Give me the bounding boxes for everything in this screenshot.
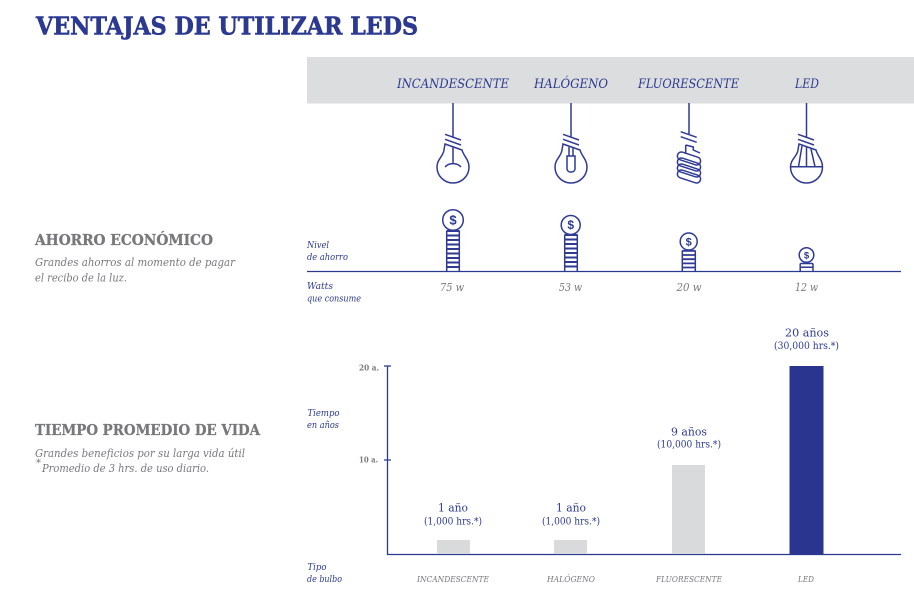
x axis category labels <box>416 573 814 585</box>
label: tiempo en anos <box>307 408 340 431</box>
watt values: 53 w <box>559 281 582 294</box>
coin stack: incandescent <box>443 210 463 271</box>
label: tiempo en anos: en años <box>307 420 339 431</box>
label: nivel de ahorro <box>306 240 348 263</box>
text block: tiempo description: Promedio de 3 hrs. de uso diario. <box>41 462 209 475</box>
label: watts que consume: Watts <box>307 281 333 292</box>
header band with bulb type names <box>307 57 914 104</box>
x axis category labels: FLUORESCENTE <box>655 575 723 585</box>
y axis with ticks <box>359 364 901 555</box>
coin stack: halogen <box>561 216 580 271</box>
bar: incandescent 1 year: (1,000 hrs.*) <box>424 516 482 528</box>
bar: LED 20 years <box>774 326 839 554</box>
header band with bulb type names: HALÓGENO <box>533 75 608 92</box>
section heading: tiempo promedio de vida: TIEMPO PROMEDIO DE VIDA <box>35 422 261 439</box>
text block: tiempo description: * <box>36 458 41 469</box>
bar: halogen 1 year <box>542 500 600 554</box>
bar: halogen 1 year: 1 año <box>556 500 586 514</box>
watt values: 20 w <box>676 281 702 294</box>
label: nivel de ahorro: Nivel <box>306 240 329 251</box>
icon: halogen bulb <box>555 103 587 183</box>
x axis category labels: LED <box>797 575 814 585</box>
bar: fluorescent 9 years: 9 años <box>671 424 707 438</box>
bar: halogen 1 year: (1,000 hrs.*) <box>542 516 600 528</box>
icon: incandescent bulb <box>437 103 469 183</box>
text block: ahorro description <box>35 256 236 284</box>
coin stack: fluorescent <box>680 233 697 271</box>
section heading: ahorro economico: AHORRO ECONÓMICO <box>34 231 213 249</box>
text block: tiempo description <box>35 447 245 475</box>
bar: LED 20 years: (30,000 hrs.*) <box>774 340 839 352</box>
label: tipo de bulbo: Tipo <box>308 562 327 573</box>
y axis with ticks: 20 a. <box>359 364 379 374</box>
savings chart baseline <box>307 270 901 272</box>
watt values: 12 w <box>795 281 818 294</box>
coin stack: incandescent: $ <box>449 212 457 228</box>
text block: ahorro description: Grandes ahorros al momento de pagar <box>35 256 236 269</box>
label: tipo de bulbo <box>307 562 342 585</box>
watt values: 75 w <box>440 281 465 294</box>
coin stack: fluorescent: $ <box>686 236 692 248</box>
bar: fluorescent 9 years <box>657 424 721 554</box>
bar: incandescent 1 year: 1 año <box>438 500 468 514</box>
label: nivel de ahorro: de ahorro <box>307 252 348 263</box>
y axis with ticks: 10 a. <box>359 456 378 466</box>
title: VENTAJAS DE UTILIZAR LEDS <box>35 12 418 40</box>
coin stack: LED: $ <box>804 250 810 261</box>
x axis category labels: INCANDESCENTE <box>416 575 490 585</box>
watt values <box>440 281 818 294</box>
label: watts que consume: que consume <box>307 294 361 304</box>
bar: incandescent 1 year <box>424 500 482 554</box>
header band with bulb type names: INCANDESCENTE <box>396 77 509 92</box>
header band with bulb type names: FLUORESCENTE <box>637 77 739 92</box>
bar: fluorescent 9 years: (10,000 hrs.*) <box>657 438 721 450</box>
header band with bulb type names: LED <box>794 77 819 92</box>
text block: tiempo description: Grandes beneficios por su larga vida útil <box>35 447 245 460</box>
label: watts que consume <box>307 281 361 304</box>
label: tiempo en anos: Tiempo <box>308 408 340 419</box>
coin stack: LED <box>799 248 814 271</box>
text block: ahorro description: el recibo de la luz. <box>35 272 127 284</box>
bar: LED 20 years: 20 años <box>785 326 829 340</box>
label: tipo de bulbo: de bulbo <box>307 574 342 585</box>
x axis category labels: HALÓGENO <box>546 573 595 585</box>
coin stack: halogen: $ <box>567 218 574 232</box>
icon: LED bulb <box>790 103 822 183</box>
icon: fluorescent bulb <box>676 103 702 184</box>
